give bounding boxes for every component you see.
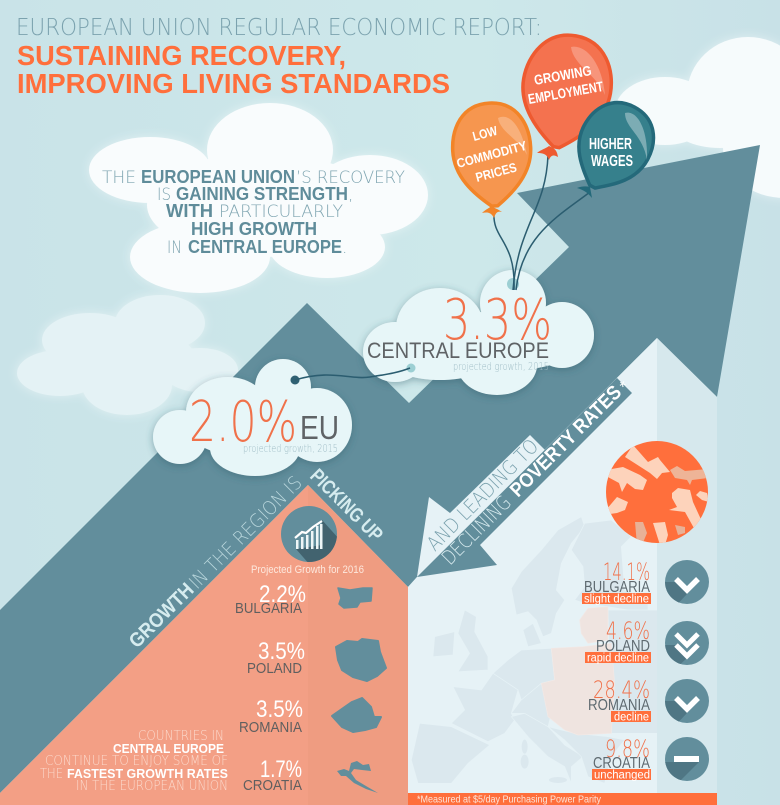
text: projected growth for 2016: Projected Growth for 2016 [251,564,364,576]
text: recovery statement: THE [102,168,136,188]
string between clouds [295,368,410,380]
poverty row: Croatia: CROATIA [593,755,650,772]
faint highlighted Central Europe on map [541,607,615,735]
poverty row: Romania: 28.4% [593,676,650,704]
headline [17,40,450,99]
text: EU: EU [300,409,339,446]
text: countries in Central Europe: CENTRAL EUROPE [113,741,224,756]
cloud: central europe 3.3% [363,270,594,395]
balloon: higher wages [561,90,666,204]
icon: Poland map [336,639,386,681]
text: countries in Central Europe: FASTEST GROWTH RATES [67,766,228,781]
poverty row: Bulgaria: BULGARIA [584,579,650,596]
icon: Romania map [332,698,381,732]
growth row: Bulgaria: BULGARIA [235,600,302,617]
poverty row: Bulgaria: slight decline [584,594,649,606]
text: recovery statement: ’S RECOVERY [296,168,405,188]
growth row: Croatia: CROATIA [243,777,302,794]
icon: growth chart [281,506,340,565]
text: recovery statement: EUROPEAN UNION [141,167,295,187]
text: recovery statement: WITH [166,201,213,221]
poverty row: Poland: 4.6% [606,617,650,645]
text: growth in the region is picking up: GROWTH [125,579,199,653]
hole in cloud [507,278,519,290]
text: countries in Central Europe: COUNTRIES IN [138,729,224,744]
title [16,15,542,99]
headline: IMPROVING LIVING STANDARDS [17,68,450,99]
headline: SUSTAINING RECOVERY, [17,40,346,71]
arrow lower half [417,378,632,577]
poverty row: Romania [589,679,709,723]
cloud panel: European Union recovery text [89,103,428,293]
cloud: EU 2.0% [153,359,352,476]
poverty row: Bulgaria: 14.1% [603,558,650,586]
growth row: Croatia: 1.7% [260,756,302,783]
icon: decline chevron [665,679,709,723]
growth row: Bulgaria: 2.2% [259,581,306,608]
icon: slight decline chevron [665,560,709,604]
text: 2.0%: 2.0% [189,390,297,455]
icon: reaching hands [606,441,709,545]
balloon: low commodity prices: LOW [471,123,500,144]
text: recovery statement [102,167,405,258]
balloon: low commodity prices [450,101,534,218]
big teal growth arrow [0,145,760,793]
text: recovery statement: IN [167,238,182,258]
text: growth in the region is picking up [125,465,387,653]
balloon: low commodity prices: PRICES [474,159,519,185]
poverty row: Bulgaria [582,560,709,605]
icon: rapid decline double chevron [665,621,709,665]
text: countries in Central Europe: THE [40,767,63,782]
text: growth in the region is picking up: PICKING UP [305,465,387,546]
asterisk: * [617,378,633,395]
text: recovery statement: GAINING STRENGTH [176,184,348,204]
text: 3.3%: 3.3% [443,288,552,353]
text: recovery statement: CENTRAL EUROPE [188,237,342,257]
growth row: Poland: 3.5% [258,638,305,665]
poverty row: Poland [585,621,709,665]
poverty row: Poland: rapid decline [587,652,649,664]
text: central europe: CENTRAL EUROPE [367,338,549,363]
hole in cloud [290,376,300,384]
icon: Croatia map [337,761,378,793]
text: recovery statement: , [348,185,353,205]
balloon: higher wages: HIGHER [589,136,632,153]
icon: unchanged dash [665,737,709,781]
poverty row: Croatia: unchanged [594,770,650,782]
text: recovery statement: IS [157,185,171,205]
growth row: Romania: ROMANIA [239,719,302,736]
cloud: top right background [615,37,780,198]
poverty row: Croatia [592,737,709,781]
balloon strings [494,155,590,290]
icon: Bulgaria map [338,588,372,608]
text: poverty rates: POVERTY RATES [506,381,626,502]
balloon: growing employment: EMPLOYMENT [527,78,605,107]
text: countries in Central Europe: CONTINUE TO ENJOY SOME OF [45,754,228,769]
footnote bar [408,793,717,805]
text: declining: DECLINING [437,490,516,570]
arrow upper half [417,435,545,577]
light poverty panel [408,338,717,793]
growth row: Poland: POLAND [247,660,302,677]
cloud: faint left background [17,295,238,415]
balloon: growing employment [513,28,619,160]
balloon: growing employment: GROWING [533,62,593,88]
balloon: higher wages: WAGES [591,153,633,170]
arrow: and leading to declining poverty rates [417,378,633,577]
text: countries in Central Europe [40,729,228,794]
growth row: Croatia [243,756,378,794]
text: countries in Central Europe: IN THE EUROPEAN UNION [76,779,228,794]
text: recovery statement: PARTICULARLY [219,202,343,222]
text: projected growth: projected growth, 2015 [453,361,549,373]
text: projected growth: projected growth, 2015 [243,443,338,455]
growth row: Romania [239,696,381,736]
salmon growth panel [0,485,408,805]
text: recovery statement: . [342,238,347,258]
hole in cloud left [406,364,416,372]
faint Europe map [411,517,658,783]
text: and leading to: AND LEADING TO [422,434,543,556]
text: growth in the region is picking up: IN THE REGION IS [185,472,307,594]
poverty row: Poland: POLAND [596,638,650,655]
growth row: Bulgaria [235,581,372,617]
poverty row: Romania: decline [614,712,649,724]
poverty row: Romania: ROMANIA [588,697,650,714]
title line: report name: EUROPEAN UNION REGULAR ECONOMIC REPORT: [16,15,542,41]
balloon: low commodity prices: COMMODITY [455,138,529,171]
growth row: Poland [247,638,386,681]
growth row: Romania: 3.5% [256,696,303,723]
text: recovery statement: HIGH GROWTH [191,219,317,239]
poverty row: Croatia: 9.8% [605,735,650,763]
